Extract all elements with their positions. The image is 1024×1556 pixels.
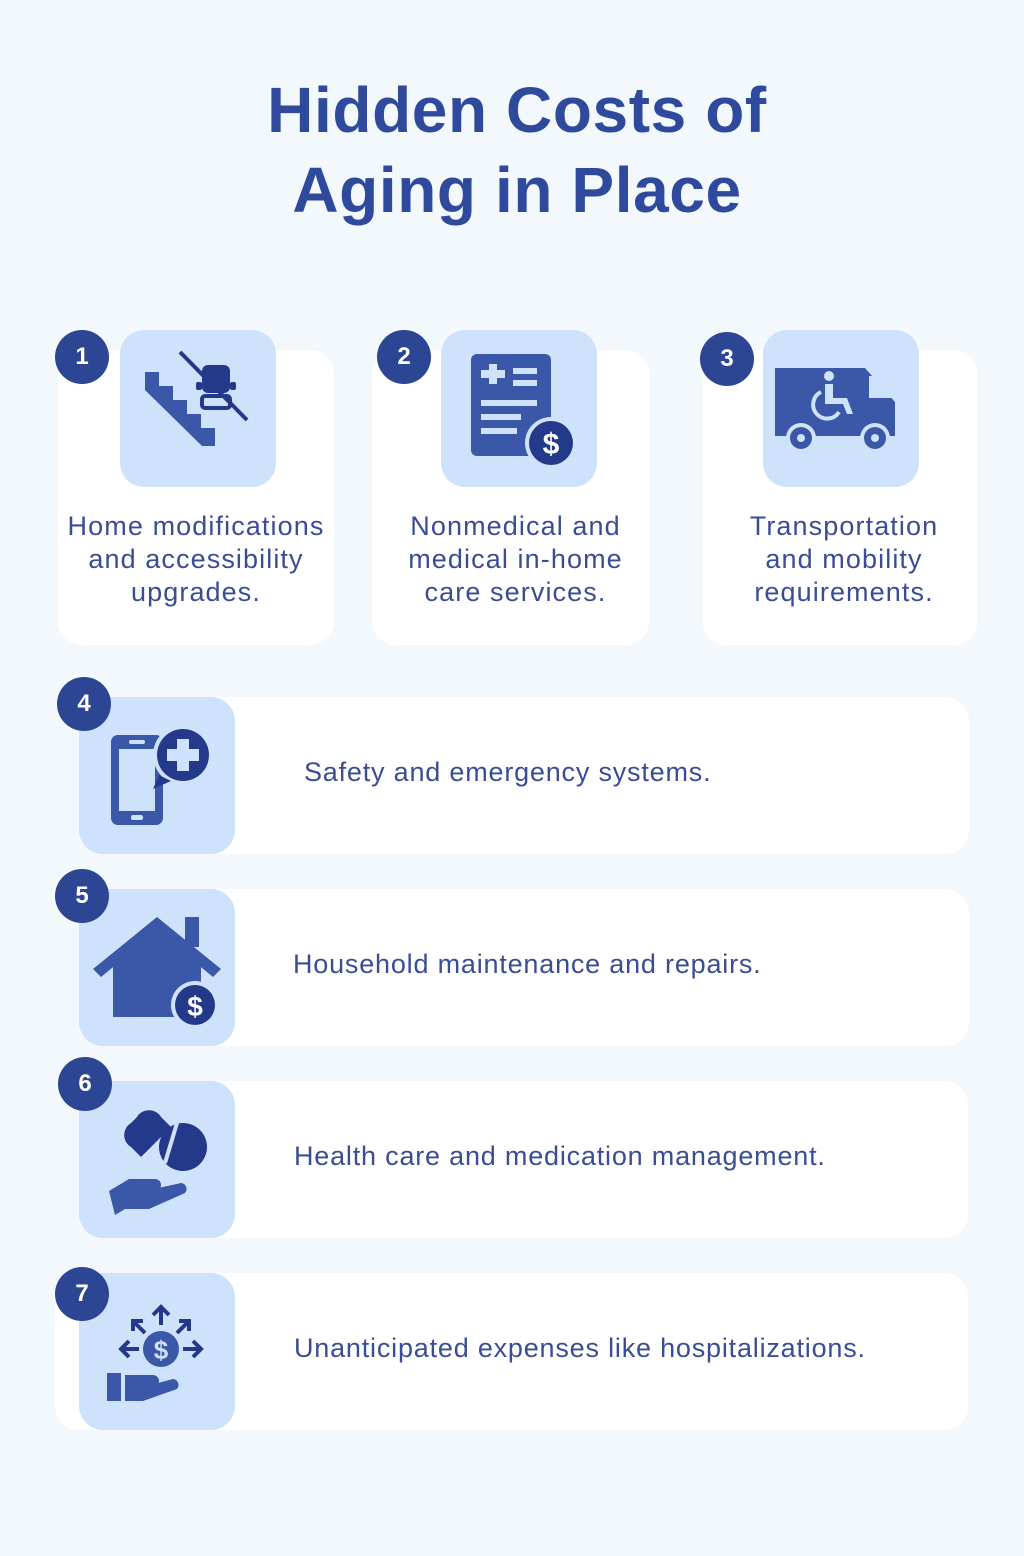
panel: item 2	[372, 330, 649, 645]
badge 6	[58, 1057, 112, 1111]
panel: item 5	[55, 869, 969, 1046]
text 2: medical in-home	[408, 544, 623, 574]
text 2: care services.	[425, 577, 606, 607]
text 1: and accessibility	[88, 544, 304, 574]
panel: item 6	[58, 1057, 968, 1238]
text 5: Household maintenance and repairs.	[293, 949, 761, 979]
icon: medical bill: $	[543, 428, 560, 461]
text 3	[750, 511, 938, 607]
badge 3: 3	[720, 345, 734, 372]
text 7: Unanticipated expenses like hospitalizations.	[294, 1333, 866, 1363]
badge 2: 2	[397, 343, 411, 370]
icon: house with dollar: $	[187, 991, 203, 1022]
badge 1	[55, 330, 109, 384]
icon: stair lift	[120, 330, 276, 487]
text 2: Nonmedical and	[410, 511, 621, 541]
badge 5	[55, 869, 109, 923]
badge 4	[57, 677, 111, 731]
title	[267, 74, 767, 226]
panel: item 3	[700, 330, 978, 645]
badge 6: 6	[78, 1070, 92, 1097]
icon: dollar with arrows	[79, 1273, 235, 1430]
text 1	[68, 511, 324, 607]
icon: phone with plus	[79, 697, 235, 854]
text 4: Safety and emergency systems.	[304, 757, 711, 787]
text 2	[408, 511, 623, 607]
title: Aging in Place	[292, 154, 742, 226]
icon: accessible van	[763, 330, 919, 487]
badge 4: 4	[77, 690, 91, 717]
panel: item 1	[55, 330, 334, 645]
title: Hidden Costs of	[267, 74, 767, 146]
text 3: Transportation	[750, 511, 938, 541]
text 3: and mobility	[765, 544, 923, 574]
badge 7	[55, 1267, 109, 1321]
text 6: Health care and medication management.	[294, 1141, 826, 1171]
badge 7: 7	[75, 1280, 89, 1307]
badge 3	[700, 332, 754, 386]
icon: house with dollar	[79, 889, 235, 1046]
icon: dollar with arrows: $	[154, 1335, 169, 1365]
text 1: Home modifications	[68, 511, 324, 541]
panel: item 7	[55, 1267, 968, 1430]
badge 2	[377, 330, 431, 384]
icon: medical bill	[441, 330, 597, 487]
badge 1: 1	[75, 343, 89, 370]
text 1: upgrades.	[131, 577, 261, 607]
panel: item 4	[57, 677, 969, 854]
icon: pills in hand	[79, 1081, 235, 1238]
text 3: requirements.	[754, 577, 934, 607]
badge 5: 5	[75, 882, 89, 909]
